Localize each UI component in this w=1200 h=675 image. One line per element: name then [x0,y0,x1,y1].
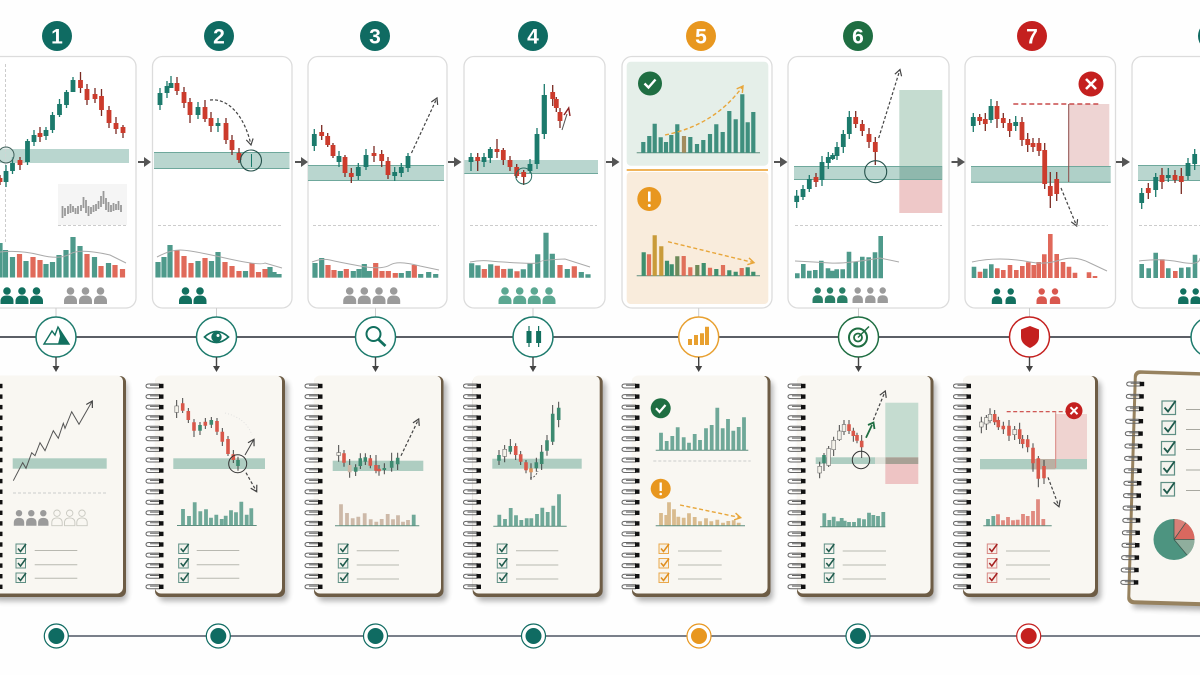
volume bars [795,236,899,278]
reward and risk boxes [885,403,918,484]
zone [308,165,444,181]
notebook 8 summary [1121,370,1200,611]
top bars [656,408,748,450]
node 7 [1017,624,1041,648]
zone [816,457,885,464]
panel: step 5 volume check [622,56,772,308]
volume bars [157,245,282,278]
zone [492,459,582,469]
step badge 7: 7 [1026,26,1038,48]
node 6 [846,624,870,648]
candles [177,398,238,471]
dashed target arrow [879,70,900,138]
step badge 8 [1198,21,1200,51]
step badge 3 [360,21,390,51]
small up arrow [562,108,570,130]
checklist [987,544,1050,582]
people: buyers and neutral [0,287,107,304]
zone [464,160,598,174]
stop line [1013,104,1100,182]
panel: step 7 failure [965,56,1116,308]
risk box and zone [980,414,1087,469]
test circle [865,161,887,183]
checklist [659,544,722,582]
volume bars [470,233,590,278]
sub-panel: strong volume [627,62,768,166]
sub-panel: weak volume [627,172,768,304]
zone [1138,165,1200,181]
step badge 6: 6 [852,26,864,48]
dashed down arrow [1061,188,1077,226]
node 3 [364,624,388,648]
zone [173,458,265,469]
candlestick chart [0,72,123,187]
checklist [1161,401,1200,496]
icon: check [638,72,662,96]
people [498,287,556,304]
circle [229,455,247,473]
notebook 5 [622,376,773,601]
reward and risk boxes [899,90,942,213]
step badge 1 [42,21,72,51]
arrow [1048,477,1059,507]
arrows [866,391,885,438]
rising line arrow [13,401,92,481]
test circle [240,150,262,171]
icon: check [651,398,671,418]
bars [983,499,1052,526]
bars [493,494,567,526]
people [343,287,400,304]
test circle [516,168,532,184]
falling arrow [668,242,754,263]
rising arrow [665,86,743,135]
candlestick chart [471,84,560,185]
step badge 2 [204,21,234,51]
panel: step 1 setup [0,56,136,308]
highlight circle [0,147,14,163]
zone [794,166,942,180]
inset mini chart [58,184,127,225]
rising bars [637,94,760,153]
stop line [1007,412,1067,468]
checklist [338,544,399,582]
volume bars [1139,253,1200,278]
node 5 [687,624,711,648]
checklist [16,544,77,582]
icon: cross [1078,72,1104,96]
vertical dashed marker [4,64,6,243]
checklist [179,544,239,582]
step badge 2: 2 [213,26,225,48]
checklist [824,544,886,582]
zone [971,166,1111,183]
notebook 7 [954,376,1101,601]
zone [13,458,107,469]
volume bars [312,258,439,278]
lower bars [656,502,745,526]
node 4 [522,624,546,648]
icon: magnifier [356,317,396,357]
flow arrows between panels [138,157,1130,167]
notebook 1 [0,376,127,601]
bars [335,504,419,526]
pie chart [1154,519,1195,560]
bars [177,502,257,526]
checklist [497,544,558,582]
icon: candles [513,317,553,357]
falling bars [637,235,760,276]
candlestick chart [973,99,1057,208]
down arrows to notebooks [52,357,1033,372]
notebook 4 [464,376,606,601]
step badge 5 [686,21,716,51]
circle [852,451,870,469]
people [1178,288,1200,304]
step badge 1: 1 [51,26,63,48]
candlestick chart [1142,149,1195,209]
candles [981,408,1044,487]
zone [333,461,423,471]
icon: bar signal [679,317,719,357]
notebook 6 [788,376,936,601]
icon: eye [196,317,236,357]
notebook 3 [305,376,447,601]
icon: cross [1066,402,1082,419]
risk box [1069,104,1109,166]
step badge 7 [1017,21,1047,51]
arrow [401,419,419,456]
people [992,288,1060,304]
panel: step 4 breakout [464,56,605,308]
dashed move arrow [210,100,251,145]
people [179,287,206,304]
panel: step 6 entry long [788,56,949,308]
dashed up arrow [412,98,437,153]
arrows [225,413,257,492]
node 1 [44,624,68,648]
bottom timeline [44,624,1200,648]
icon: mountain [36,317,76,357]
step badge 4 [518,21,548,51]
icon: step 8 circle [1191,317,1200,357]
panel: step 8 review [1132,56,1200,308]
icon: target [838,317,878,357]
step badge 5: 5 [695,26,707,48]
notebook 2 [146,376,288,601]
candlestick chart [160,76,239,163]
arrow [680,505,741,518]
people row [14,510,87,526]
candlestick chart [314,125,408,183]
step badge 6 [843,21,873,51]
candlestick chart [797,111,875,208]
step badge 3: 3 [369,26,381,48]
panel: step 3 consolidation [308,56,447,308]
connectors from panels to icons [56,308,1030,317]
support zone [0,149,129,163]
node 2 [206,624,230,648]
candles [499,402,559,480]
candles [820,420,862,478]
top timeline line [0,336,1200,338]
volume bars [972,234,1107,278]
step badge 4: 4 [527,26,539,48]
zone [154,152,290,169]
candles [339,445,398,478]
icon: warning [637,187,661,211]
spiral binding [1121,382,1144,585]
bars [820,512,885,527]
icon: warning [651,479,671,499]
people [812,287,888,303]
icon: shield [1010,317,1050,357]
panel: step 2 pullback [152,56,292,308]
volume bars [0,237,126,278]
